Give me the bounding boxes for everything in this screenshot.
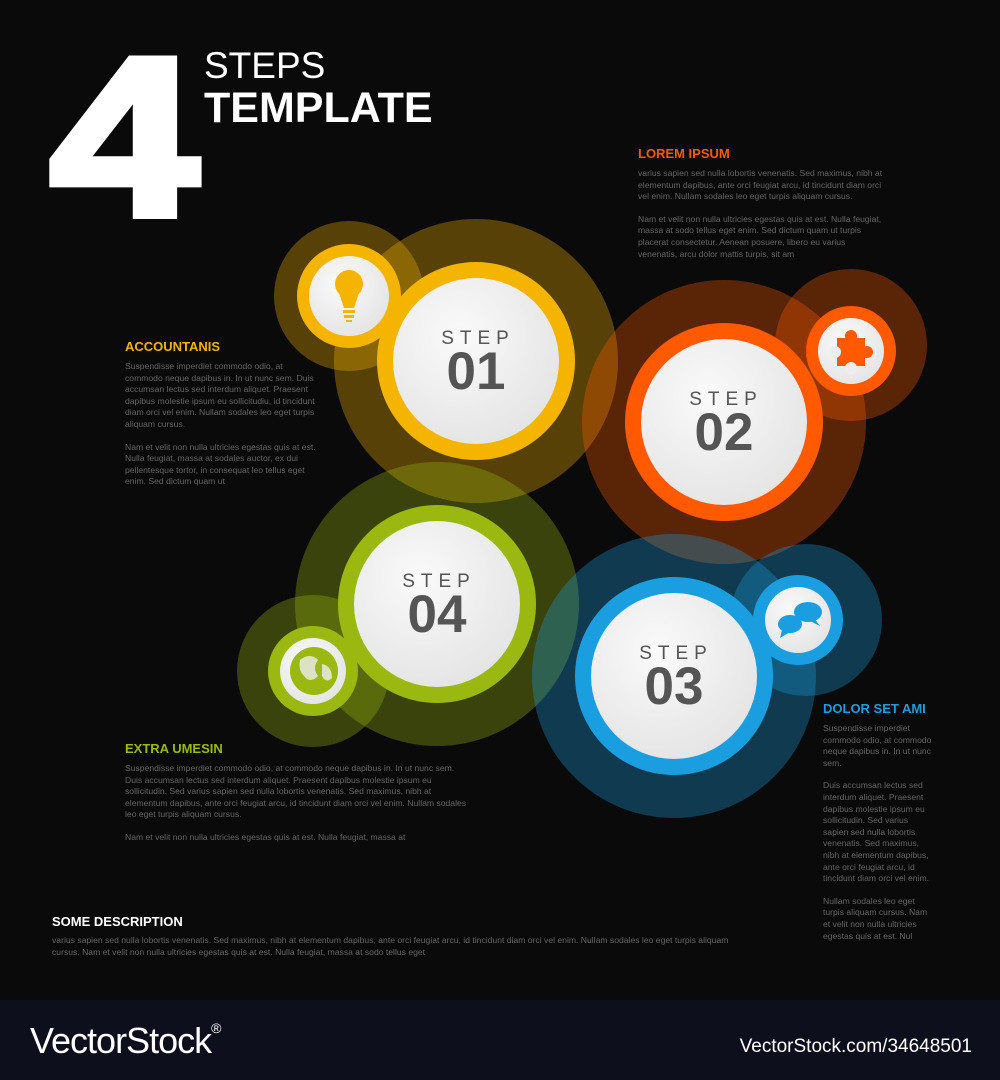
icon: speech bubbles	[778, 602, 822, 638]
text: dolor set ami: Duis accumsan lectus sed interdum aliquet. Praesent dapibus molestie ipsum eu sollicitudin. Sed varius sapien sed nulla lobortis venenatis. Sed maximus, nibh at elementum dapibus, ante orci feugiat arcu, id tincidunt diam orci vel enim.	[823, 780, 929, 883]
step 01: STEP	[441, 328, 515, 349]
text: accountanis: Nam et velit non nulla ultricies egestas quis at est. Nulla feugiat, massa at sodales auctor, ex dui pellentesque tortor, in consequat leo tellus eget enim. Sed dictum quam ut	[125, 442, 316, 486]
text: dolor set ami	[823, 701, 931, 940]
text: some description: SOME DESCRIPTION	[52, 914, 183, 929]
text: lorem ipsum: LOREM IPSUM	[638, 146, 730, 161]
step 03: STEP	[639, 643, 713, 664]
step 02: STEP	[689, 389, 763, 410]
step 03: 03	[645, 657, 703, 716]
text: dolor set ami: Nullam sodales leo eget turpis aliquam cursus. Nam et velit non nulla ultricies egestas quis at est. Nul	[823, 896, 927, 940]
step 01: 01	[447, 342, 505, 401]
text: accountanis: Suspendisse imperdiet commodo odio, at commodo neque dapibus in. In ut nunc sem. Duis accumsan lectus sed interdum aliquet. Praesent dapibus molestie ipsum eu sollicitudiu, id tincidunt diam orci vel enim. Nullam sodales leo eget turpis aliquam cursus.	[125, 361, 315, 429]
text: extra umesin	[125, 741, 466, 842]
title	[204, 45, 433, 132]
text: accountanis	[125, 339, 316, 486]
step 04	[237, 462, 579, 747]
text: lorem ipsum: Nam et velit non nulla ultricies egestas quis at est. Nulla feugiat, massa at sodo tellus eget enim. Sed dictum quam ut turpis placerat consectetur. Aenean posuere, libero eu varius venenatis, arcu dolor mattis turpis, sit am	[638, 214, 881, 259]
text: dolor set ami: Suspendisse imperdiet commodo odio, at commodo neque dapibus in. In ut nunc sem.	[823, 723, 931, 768]
icon: globe	[290, 647, 338, 695]
footer watermark bar: VectorStock®	[30, 1020, 220, 1061]
text: extra umesin: EXTRA UMESIN	[125, 741, 223, 756]
big number 4: 4	[50, 10, 198, 263]
text: extra umesin: Nam et velit non nulla ultricies egestas quis at est. Nulla feugiat, massa at	[125, 832, 405, 842]
footer watermark bar	[0, 1000, 1000, 1080]
text: lorem ipsum	[638, 146, 882, 259]
step 04: STEP	[402, 571, 476, 592]
footer watermark bar: VectorStock.com/34648501	[740, 1036, 972, 1057]
step 02: 02	[695, 403, 753, 462]
text: accountanis: ACCOUNTANIS	[125, 339, 220, 354]
text: some description	[52, 914, 728, 957]
title: TEMPLATE	[204, 84, 433, 132]
step 04: 04	[408, 585, 467, 644]
text: lorem ipsum: varius sapien sed nulla lobortis venenatis. Sed maximus, nibh at elementum dapibus, ante orci feugiat arcu, id tincidunt diam orci vel enim. Nullam sodales leo eget turpis aliquam cursus.	[638, 168, 882, 201]
step 01	[274, 219, 618, 503]
text: extra umesin: Suspendisse imperdiet commodo odio, at commodo neque dapibus in. In ut nunc sem. Duis accumsan lectus sed interdum aliquet. Praesent dapibus molestie ipsum eu sollicitudin. Sed varius sapien sed nulla lobortis venenatis. Sed maximus, nibh at elementum dapibus, ante orci feugiat arcu, id tincidunt diam orci vel enim. Nullam sodales leo eget turpis aliquam cursus.	[125, 763, 466, 819]
text: some description: varius sapien sed nulla lobortis venenatis. Sed maximus, nibh at elementum dapibus, ante orci feugiat arcu, id tincidunt diam orci vel enim. Nullam sodales leo eget turpis aliquam cursus. Nam et velit non nulla ultricies egestas quis at est. Nulla feugiat, massa at sodo tellus eget	[52, 935, 728, 957]
step 03	[532, 534, 882, 818]
icon: puzzle	[829, 330, 873, 374]
icon: bulb	[335, 270, 363, 322]
step 02	[582, 269, 927, 564]
title: STEPS	[204, 45, 325, 86]
text: dolor set ami: DOLOR SET AMI	[823, 701, 926, 716]
